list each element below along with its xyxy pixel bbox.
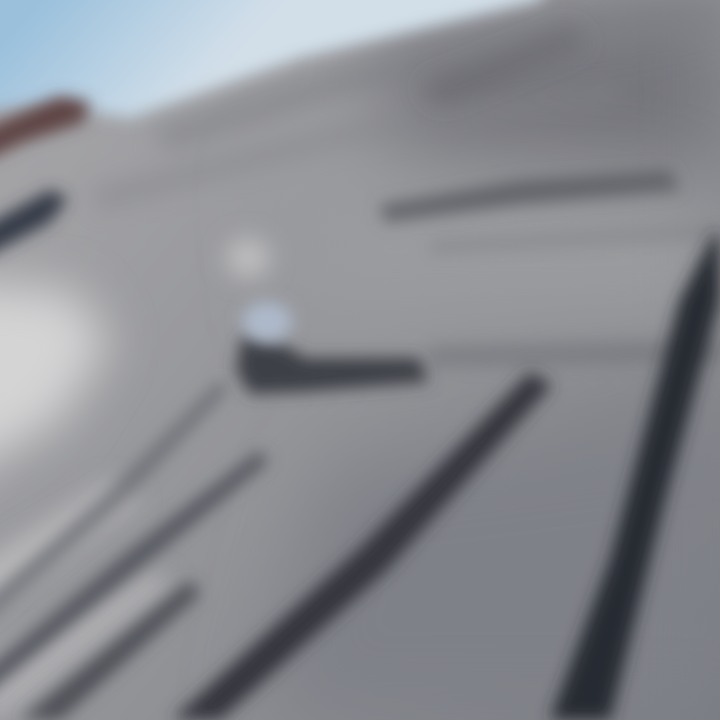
dark seam upper right	[380, 170, 680, 222]
dark diagonal seam centre	[172, 372, 552, 720]
horizontal seams	[430, 225, 720, 368]
faint streak near top	[420, 25, 590, 105]
glare on left side	[0, 280, 110, 500]
thin diagonal seams lower left	[0, 380, 268, 720]
roof ridge streaks	[90, 4, 720, 210]
small white patch	[226, 238, 270, 278]
figure on the roof	[236, 302, 428, 394]
roof tonal areas	[260, 0, 720, 720]
light strips lower left	[0, 480, 175, 720]
sky	[0, 0, 570, 118]
red-brown chimney at horizon	[0, 96, 90, 172]
dark vent on left edge	[0, 190, 68, 270]
dark diagonal seam right	[550, 230, 720, 720]
figure body	[236, 335, 428, 394]
figure head	[242, 302, 292, 342]
